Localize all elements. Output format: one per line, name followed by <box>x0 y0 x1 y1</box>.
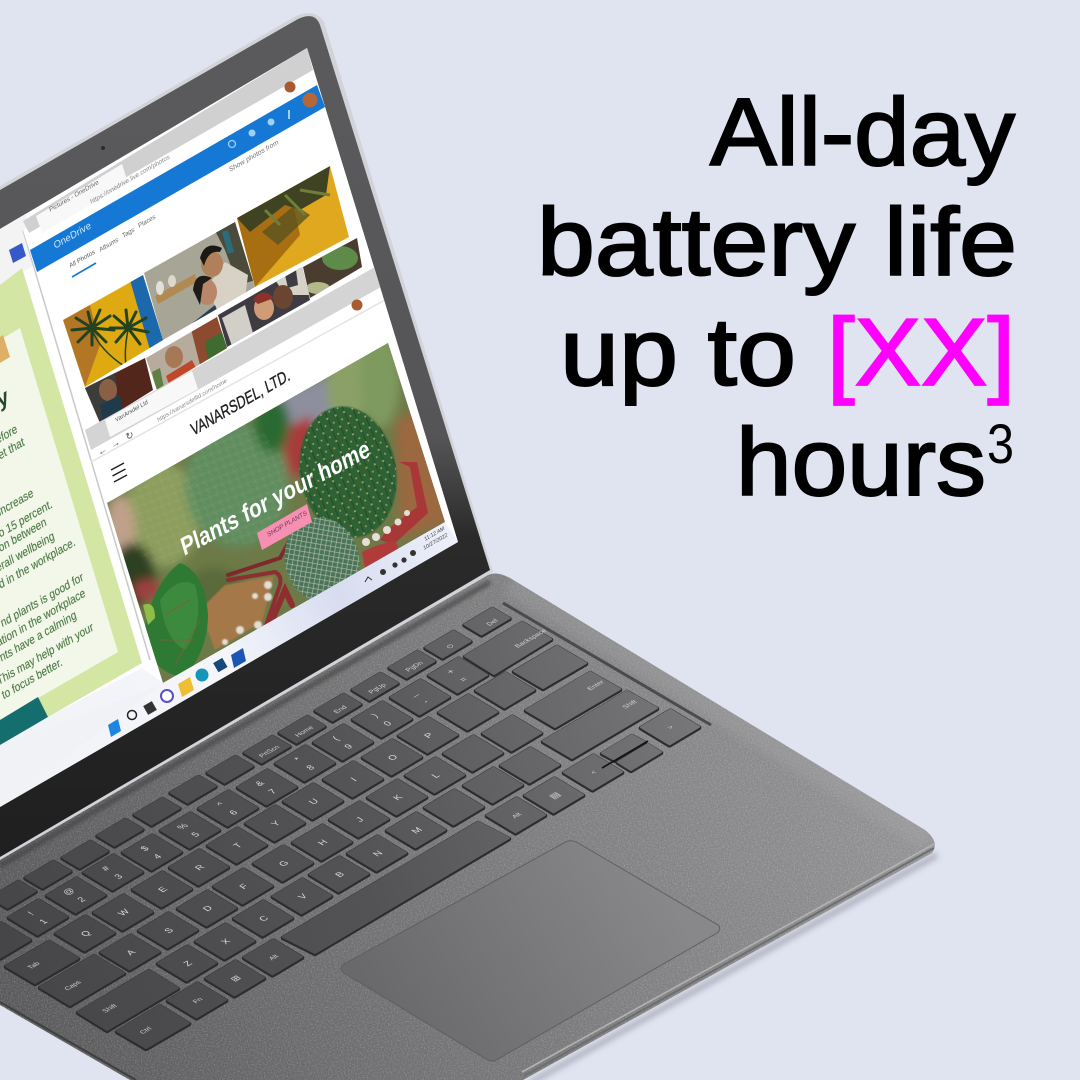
start button <box>108 719 121 737</box>
modifier and function key labels: Alt <box>511 812 524 820</box>
number row labels <box>24 667 470 925</box>
shop plants button <box>257 504 312 550</box>
paddle cactus <box>143 563 208 677</box>
document text: nts have a calming <box>0 609 78 665</box>
modifier and function key labels: PgUp <box>367 682 388 695</box>
account avatar <box>302 92 318 108</box>
right red pot <box>380 462 428 545</box>
hero heading: Plants for your home <box>178 434 373 562</box>
letter key labels: C <box>257 914 271 923</box>
letter key labels: T <box>231 841 245 849</box>
nav arrows <box>97 429 135 459</box>
folder icon <box>178 677 194 697</box>
headline: 3 <box>987 412 1014 475</box>
blurred background plants <box>105 332 450 612</box>
active tab <box>36 164 126 227</box>
letter key labels: V <box>296 892 310 901</box>
blue header band <box>30 85 325 272</box>
word icon <box>231 648 246 668</box>
modifier and function key labels: ⊞ <box>228 974 243 983</box>
document image: teal leaf <box>0 697 48 747</box>
active tab underline <box>72 263 96 277</box>
letter key labels: P <box>422 731 436 740</box>
modifier and function key labels: Ctrl <box>139 1026 154 1035</box>
letter key labels: D <box>201 904 215 913</box>
modifier and function key labels: PrtScn <box>258 745 282 759</box>
letter key labels: S <box>162 926 176 935</box>
header icons <box>228 110 290 148</box>
address bar url: https://onedrive.live.com/photos <box>90 153 171 206</box>
letter key labels: R <box>193 863 207 872</box>
number row labels: % <box>175 822 190 831</box>
menu tabs: Places <box>138 213 157 230</box>
headline: battery life <box>537 189 1017 296</box>
letter key labels: U <box>307 797 321 806</box>
number row labels: 2 <box>75 896 88 903</box>
modifier and function key labels: PgDn <box>404 660 425 673</box>
document text: nd plants is good for <box>0 571 85 630</box>
number row labels: = <box>457 675 470 683</box>
modifier and function key labels: Backspace <box>514 628 549 649</box>
headline <box>537 79 1017 516</box>
number row labels: ^ <box>215 800 227 808</box>
number row labels: 5 <box>189 831 202 838</box>
tab title: VanArsdel Ltd <box>115 400 149 424</box>
modifier and function key labels: > <box>667 725 676 731</box>
number row labels: ( <box>330 735 341 742</box>
headline: up to <box>560 299 796 406</box>
toolbar divider <box>91 300 385 462</box>
photo: couple in kitchen <box>144 222 255 340</box>
OneDrive label: OneDrive <box>53 220 93 252</box>
letter key labels: H <box>316 838 330 847</box>
middle red pot rims <box>228 540 292 625</box>
letter key labels: M <box>409 826 424 835</box>
number row labels: + <box>444 667 457 675</box>
modifier and function key labels: Shift <box>101 1003 119 1014</box>
shop plants button: SHOP PLANTS <box>267 509 308 539</box>
letter key labels: K <box>391 793 405 802</box>
screen bezel <box>0 13 493 860</box>
letter key labels: A <box>124 948 138 957</box>
photo: potted plants <box>303 238 362 298</box>
letter key labels: E <box>156 885 170 894</box>
number row labels: ) <box>369 712 380 719</box>
headline: All-day <box>710 79 1015 186</box>
tab title: Pictures - OneDrive <box>49 179 100 214</box>
search icon <box>128 710 136 720</box>
tray icons <box>365 550 416 582</box>
ribbon icon <box>9 243 26 263</box>
gallery icon <box>143 701 157 715</box>
zoom percentage: 72% <box>145 677 158 690</box>
letter key labels: X <box>219 937 233 946</box>
modifier and function key labels: End <box>333 705 349 715</box>
document page <box>0 328 118 720</box>
modifier and function key labels: Enter <box>586 679 607 692</box>
number row labels: 8 <box>304 764 317 771</box>
menu tabs: All Photos <box>69 248 97 270</box>
photo: man by wood wall <box>85 358 153 422</box>
number row labels: 6 <box>227 809 240 816</box>
touchpad <box>341 841 720 1061</box>
modifier and function key labels: < <box>590 770 599 776</box>
menu tabs: Albums <box>99 236 120 254</box>
tab strip <box>85 267 381 450</box>
document text: to focus better. <box>1 656 64 702</box>
edge icon <box>196 668 208 682</box>
number row labels: - <box>420 698 431 705</box>
number row labels: & <box>253 779 267 788</box>
letter key labels: L <box>429 772 442 779</box>
keyboard keys <box>0 606 702 1052</box>
number row labels: 0 <box>381 720 394 727</box>
document image: orange block <box>0 335 10 363</box>
menu tabs: Tags <box>122 226 136 240</box>
number row labels: 4 <box>151 853 164 860</box>
modifier and function key labels: Home <box>294 725 316 738</box>
photo: yellow wall leaves <box>235 165 355 290</box>
small round cactus <box>275 509 369 611</box>
number row labels: 1 <box>37 918 50 925</box>
letter key labels: G <box>276 859 291 868</box>
photo: yellow wall palm <box>63 275 163 387</box>
letter key labels: Z <box>181 959 195 967</box>
letter key labels: Q <box>78 929 93 938</box>
keyboard deck <box>0 574 935 1080</box>
gravel tray <box>200 576 274 650</box>
keyboard tray groove <box>503 603 711 725</box>
chat icon <box>161 690 173 702</box>
letter key labels: O <box>385 753 400 762</box>
window: OneDrive browser <box>23 48 381 430</box>
modifier and function key labels: ▤ <box>547 791 563 800</box>
lower red pot rim <box>362 541 398 568</box>
number row labels: ! <box>25 910 36 917</box>
account avatar <box>352 300 362 310</box>
headline: hours <box>736 409 986 516</box>
number row labels: $ <box>138 845 151 852</box>
number row labels: 7 <box>266 788 279 795</box>
taskbar <box>0 522 458 807</box>
menu tabs <box>70 216 156 268</box>
number row labels: 3 <box>112 873 125 880</box>
clock: 11:12 AM <box>424 526 446 543</box>
headline: [XX] <box>827 299 1015 406</box>
window: VanArsdel browser <box>85 267 460 700</box>
letter key labels: F <box>237 882 251 890</box>
modifier and function key labels: Del <box>485 618 501 627</box>
letter key labels <box>78 731 442 967</box>
number row labels: 9 <box>342 743 355 750</box>
photo: man with glasses <box>146 317 227 390</box>
number row labels: @ <box>60 886 77 896</box>
spines on background cacti <box>125 425 287 565</box>
photo: smiling couple <box>218 267 310 347</box>
show photos filter: Show photos from <box>229 139 280 174</box>
gravel pebbles <box>222 581 272 645</box>
letter key labels: I <box>348 776 359 783</box>
hamburger menu <box>111 463 127 482</box>
url: https://vanarsdelltd.com/home <box>157 378 228 424</box>
large barrel cactus <box>289 399 407 545</box>
nav arrows: ← <box>97 443 109 459</box>
modifier and function key labels: Tab <box>26 961 42 970</box>
cactus hero photo <box>100 330 460 690</box>
letter key labels: B <box>333 870 347 879</box>
number row labels: # <box>99 864 113 872</box>
modifier and function key labels: Shift <box>621 699 639 710</box>
webcam <box>101 146 105 150</box>
store icon <box>213 658 228 672</box>
document status bar <box>18 690 137 762</box>
clock: 10/27/2022 <box>423 532 448 552</box>
tab strip <box>23 48 313 233</box>
modifier and function key labels <box>26 618 676 1035</box>
document text <box>0 423 95 702</box>
letter key labels: N <box>371 849 385 858</box>
modifier and function key labels: Caps <box>63 980 84 992</box>
window: document editor <box>0 212 158 762</box>
active tab <box>105 371 198 437</box>
laptop shadow <box>526 852 938 1080</box>
modifier and function key labels: Fn <box>192 997 205 1005</box>
number row labels: * <box>292 756 304 763</box>
letter key labels: J <box>354 816 366 823</box>
brand name: VANARSDEL, LTD. <box>189 365 292 440</box>
laptop display <box>0 48 458 807</box>
modifier and function key labels: Alt <box>268 954 281 962</box>
nav arrows: → <box>110 436 122 452</box>
nav arrows: ↻ <box>125 429 135 444</box>
right pot pebbles <box>362 510 410 546</box>
letter key labels: W <box>116 907 132 917</box>
number row labels: _ <box>405 689 420 698</box>
letter key labels: Y <box>269 819 283 828</box>
modifier and function key labels: ⏻ <box>445 643 457 650</box>
small avatar <box>284 82 296 92</box>
